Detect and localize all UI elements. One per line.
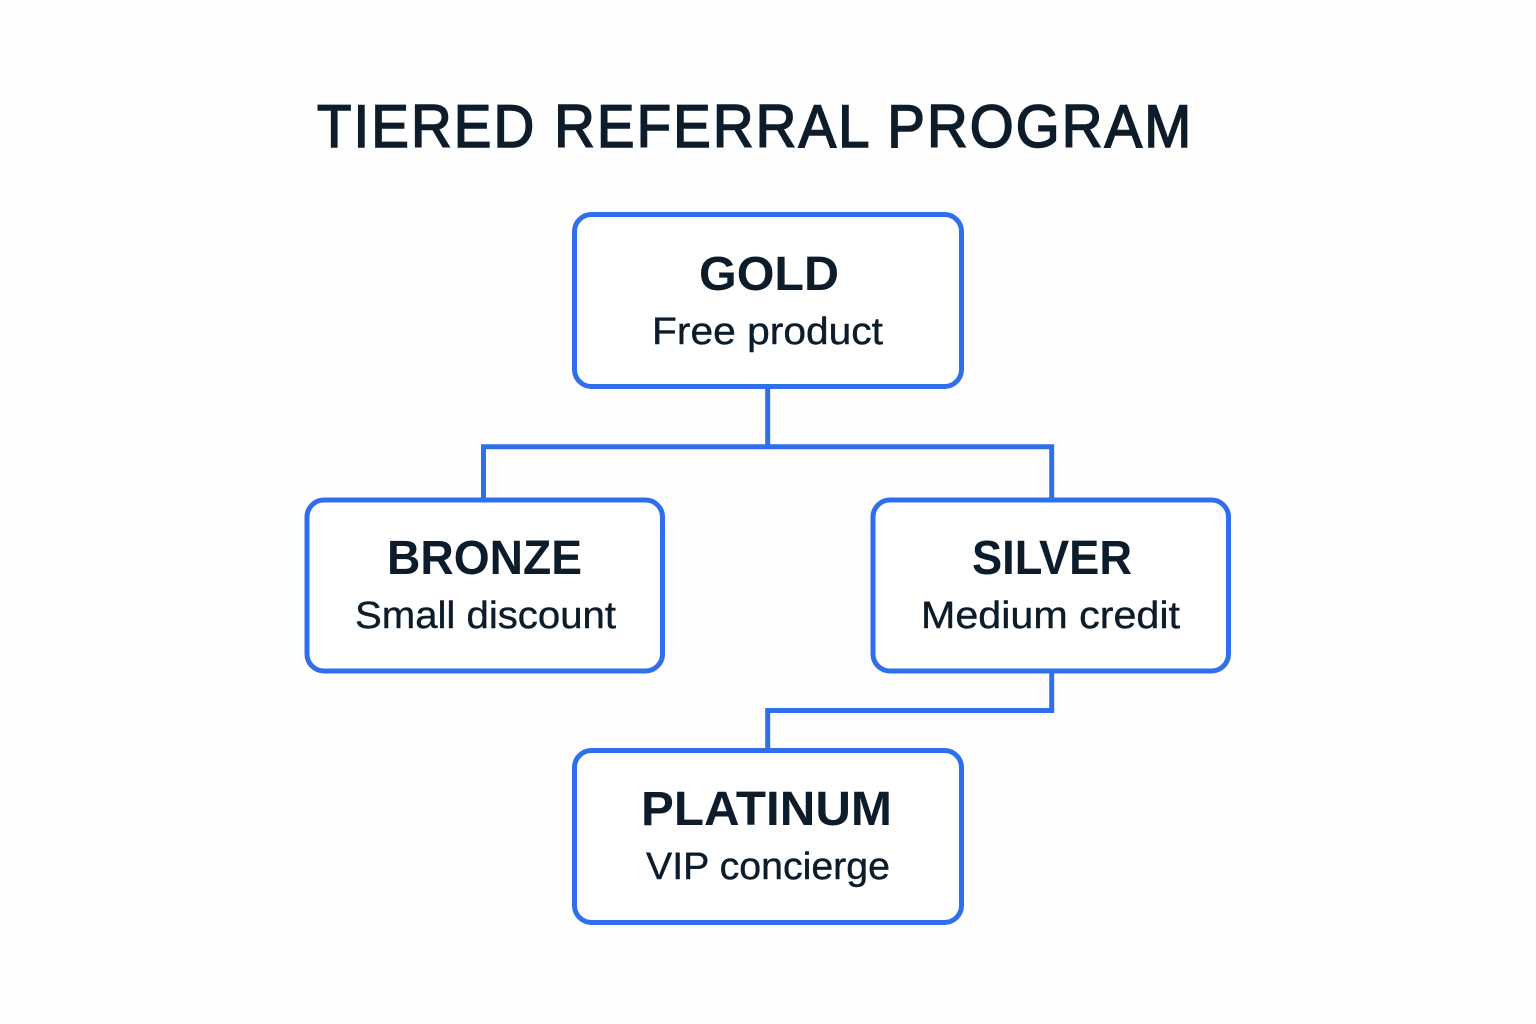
silver reward: Medium credit — [921, 595, 1180, 637]
panel: platinum tier — [574, 750, 962, 922]
silver heading: SILVER — [972, 532, 1132, 585]
panel: gold tier — [574, 214, 962, 386]
gold reward: Free product — [652, 311, 883, 353]
connector: gold to bronze and silver — [484, 387, 1052, 500]
platinum reward: VIP concierge — [646, 846, 890, 888]
gold heading: GOLD — [699, 248, 839, 301]
bronze heading: BRONZE — [387, 532, 582, 585]
title: TIERED REFERRAL PROGRAM — [317, 93, 1191, 160]
panel: silver tier — [873, 500, 1228, 671]
connector: silver to platinum — [768, 671, 1052, 751]
panel: bronze tier — [307, 500, 662, 671]
bronze reward: Small discount — [355, 595, 616, 637]
platinum heading: PLATINUM — [641, 783, 892, 836]
